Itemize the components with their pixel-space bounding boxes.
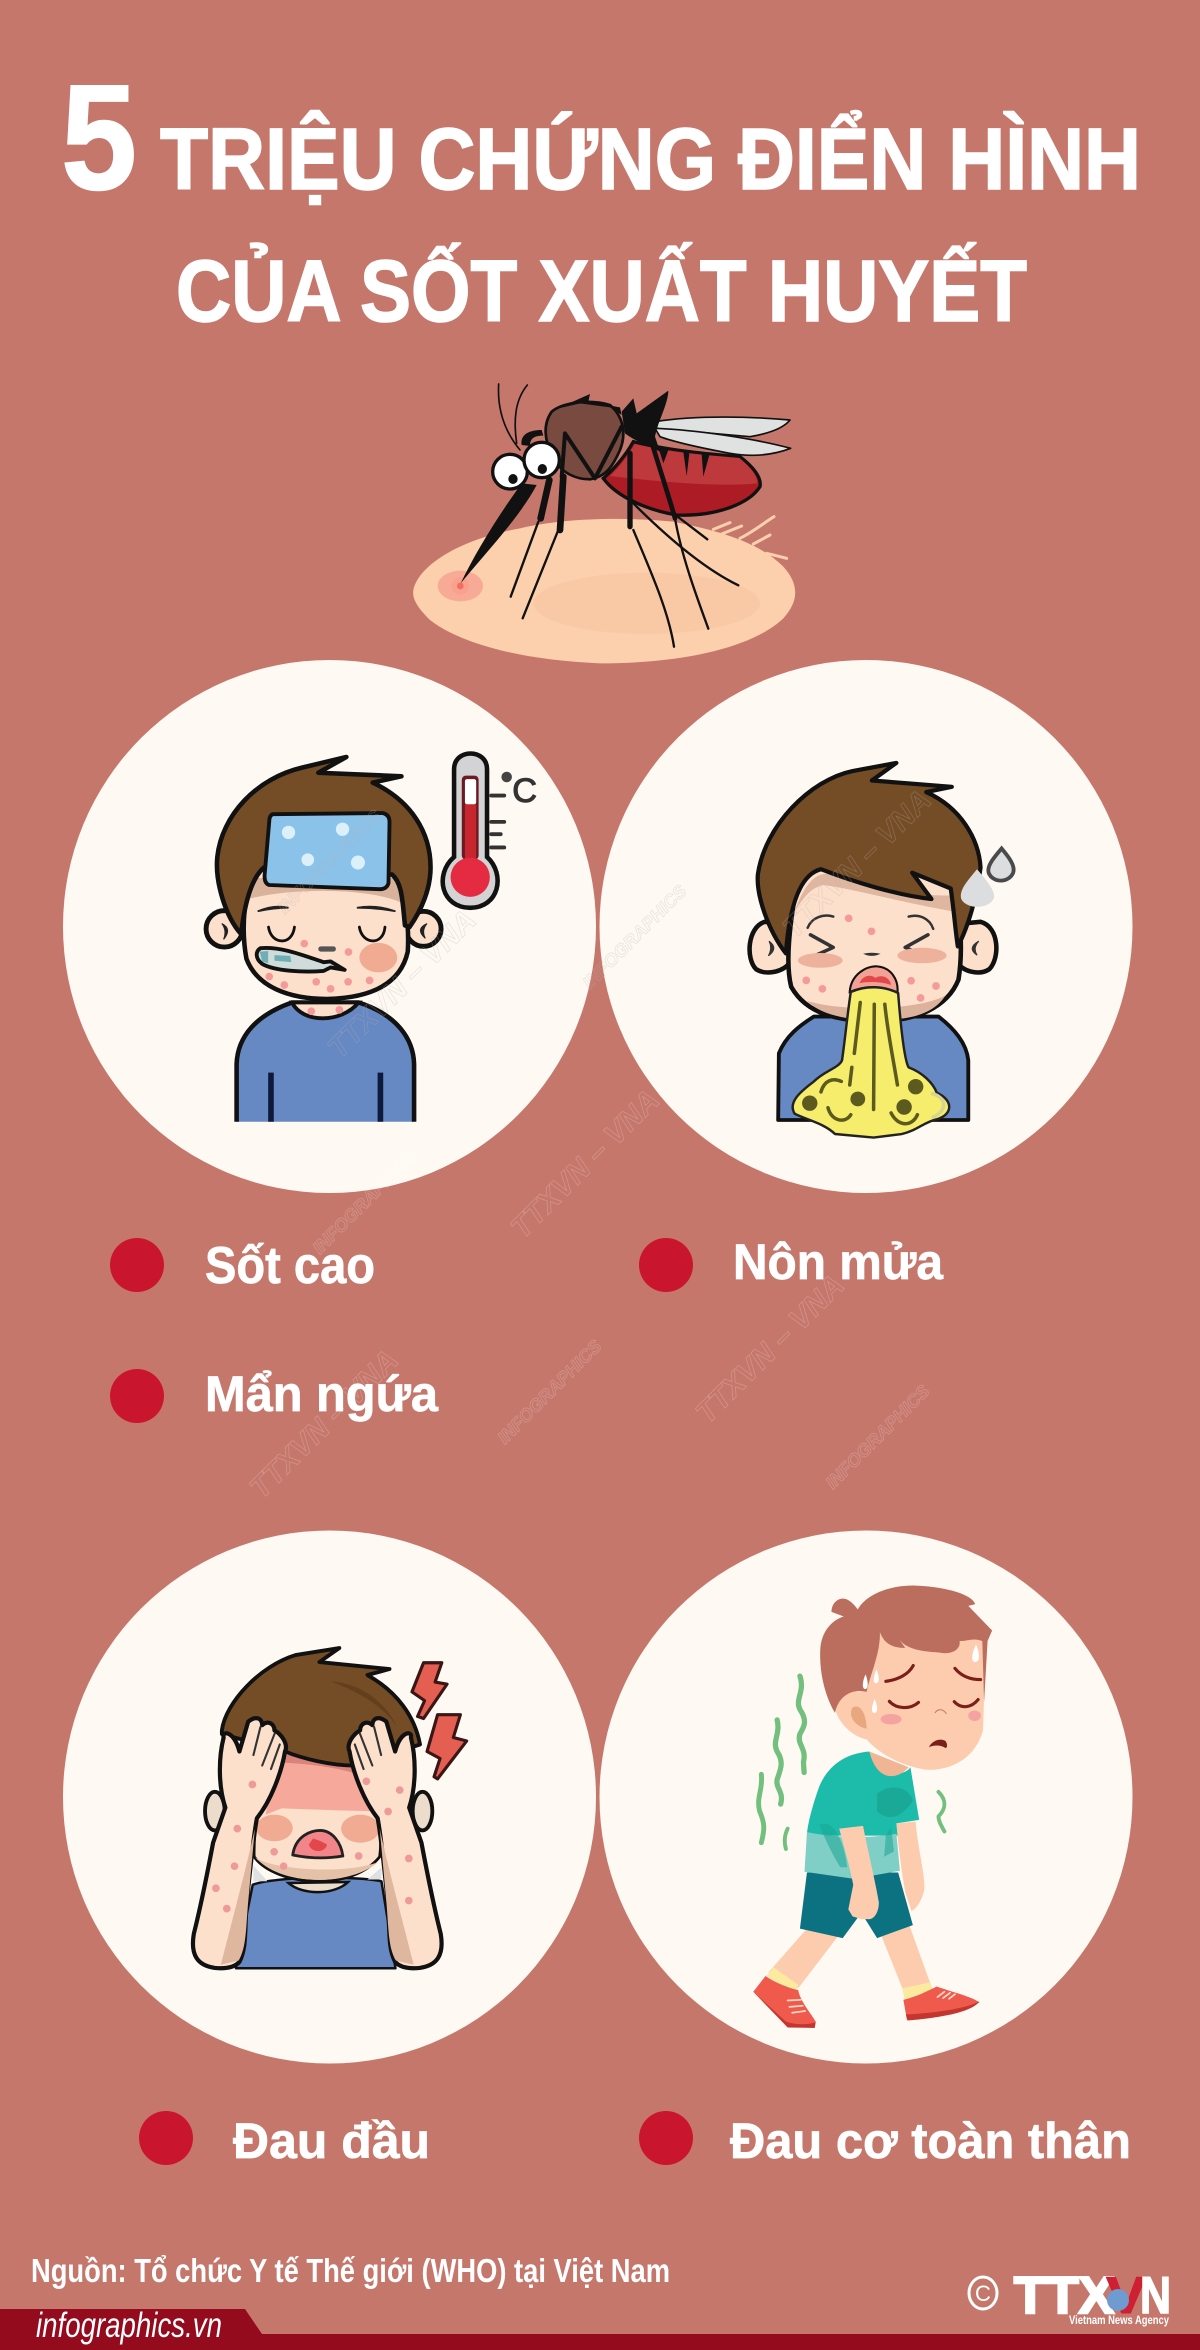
watermarks: TTXVN – VNA [690,1269,851,1430]
rash spots [802,914,940,1002]
bite mark [438,571,483,601]
hair [758,763,981,953]
panel: high fever [63,660,596,1193]
shorts [800,1873,913,1938]
label: headache [139,2111,430,2169]
label: muscle pain: Đau cơ toàn thân [730,2113,1131,2169]
shirt [237,1003,414,1122]
logo: TTXVN: Vietnam News Agency [1069,2313,1169,2327]
label: rash: Mẩn ngứa [205,1366,439,1422]
watermarks: TTXVN – VNA [505,1084,666,1245]
illustration: boy holding head [193,1648,467,1968]
circle background [63,660,596,1193]
cheek [359,943,397,972]
back leg [768,1929,839,1988]
face details [881,1666,981,1748]
eyes and brows [808,916,933,957]
watermarks: TTXVN – VNA [322,904,483,1065]
label: headache: Đau đầu [233,2113,430,2169]
cheeks [256,1815,380,1843]
panel: muscle pain [600,1530,1132,2064]
watermarks: INFOGRAPHICS [822,1381,933,1493]
sweat drops [863,1645,979,1713]
ears [205,1792,432,1830]
left arm [193,1718,286,1968]
circle background [63,1530,596,2064]
mouth thermometer [257,948,345,972]
illustration: tired boy walking [753,1586,992,2028]
ears [750,922,996,972]
label: high fever [110,1237,375,1295]
hair [222,1648,420,1766]
label: vomiting: Nôn mửa [733,1234,944,1290]
mosquito abdomen [603,442,760,515]
watermarks: TTXVN – VNA [777,784,938,945]
mouth [850,966,898,993]
shirt [804,1751,919,1879]
watermarks: TTXVN – VNA [244,1344,405,1505]
mosquito proboscis [461,483,537,583]
eyebrows and eyes [258,907,395,952]
shirt [778,1017,968,1120]
source note: Nguồn: Tổ chức Y tế Thế giới (WHO) tại Việt Nam [31,2252,670,2289]
rash spots [265,940,373,1015]
circle background [600,1530,1132,2064]
illustration: boy vomiting [750,763,1014,1138]
odor waves [759,1676,944,1849]
right arm [349,1718,442,1968]
icon: pain bolts [412,1663,467,1779]
socks [767,1967,933,2000]
watermarks: INFOGRAPHICS [494,1336,605,1448]
logo: TTXVN [969,2267,1171,2327]
mosquito thorax [521,394,623,479]
mouth [293,1830,343,1858]
front leg [881,1923,931,1994]
title: 5 [61,53,137,221]
ears [206,911,441,947]
illustration: boy with fever [206,753,537,1122]
icon: sweat drops [961,849,1014,907]
face [244,860,408,999]
mosquito eyes [493,442,559,489]
panel: vomiting [600,660,1132,1193]
watermarks: INFOGRAPHICS [274,806,385,918]
mosquito legs [511,427,738,647]
shirt [236,1878,395,1968]
shoes [753,1976,980,2028]
circle background [600,660,1132,1193]
footer band [0,2306,1200,2350]
rash spots [212,1777,413,1912]
degree celsius [501,772,537,810]
logo: TTXVN: TTX [1014,2267,1114,2325]
label: rash [110,1366,439,1423]
watermarks: INFOGRAPHICS [309,1146,420,1258]
watermarks: INFOGRAPHICS [579,881,690,993]
face [788,867,961,1021]
mosquito wings [655,417,791,455]
degree celsius: C [512,772,537,810]
title [61,53,1141,340]
neck [869,1751,909,1776]
logo: TTXVN: N [1140,2267,1171,2325]
head [820,1586,992,1770]
mosquito wing base [622,391,668,452]
face [254,1759,381,1881]
copyright mark [969,2277,997,2309]
icon: thermometer [443,753,537,908]
cheeks [798,948,947,968]
logo: TTXVN: V [1106,2267,1146,2325]
arms [839,1822,924,1919]
watermarks [244,784,938,1505]
vomit [793,987,949,1138]
mosquito antennae [498,384,527,450]
label: vomiting [639,1234,944,1292]
title: CỦA SỐT XUẤT HUYẾT [176,243,1027,340]
illustration: mosquito biting skin [413,384,795,663]
hair [217,757,431,934]
label: high fever: Sốt cao [205,1237,375,1295]
footer band: infographics.vn [36,2306,222,2345]
copyright mark: C [975,2281,991,2306]
nose [863,953,881,956]
panel: headache [63,1530,596,2064]
cold compress [265,813,390,889]
